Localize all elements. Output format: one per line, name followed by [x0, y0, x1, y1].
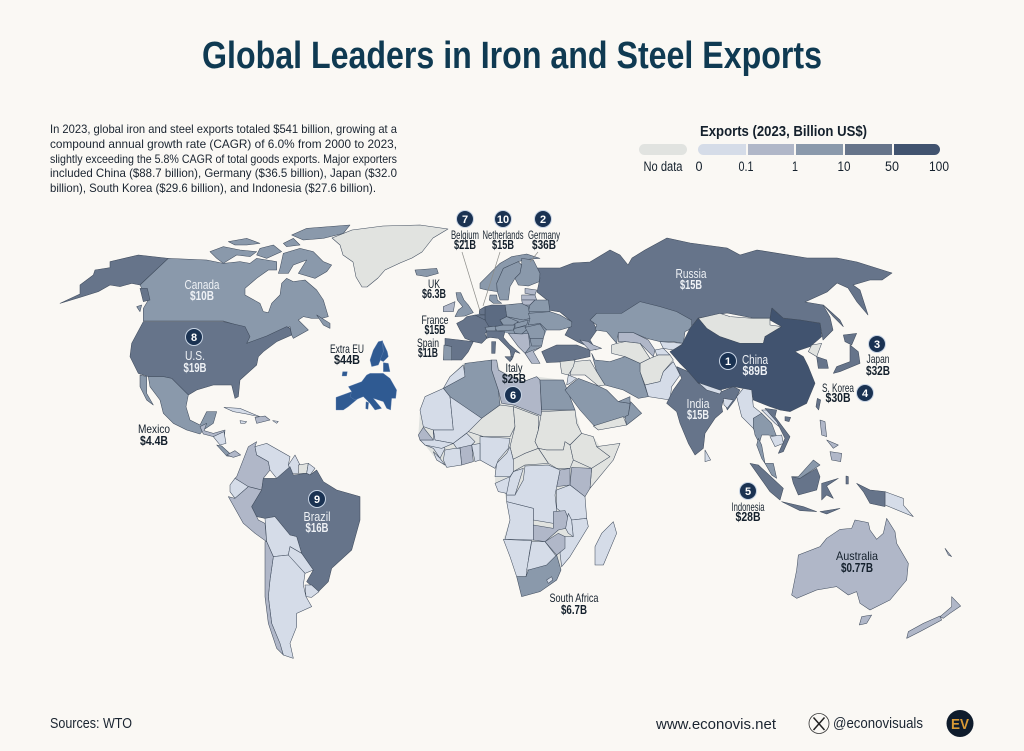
- label: Canada: [184, 278, 220, 303]
- footer: X handle: @econovisuals: [833, 715, 923, 732]
- text block: summary paragraph: included China ($88.7 billion), Germany ($36.5 billion), Japan ($32.0: [50, 166, 397, 180]
- legend: exports scale: 50: [885, 159, 899, 174]
- label: Italy: [502, 361, 526, 404]
- label: UK: UK: [428, 277, 440, 291]
- label: Mexico: Mexico: [138, 422, 170, 436]
- label: China: 1: [725, 356, 731, 368]
- map region: Southeast Asia: [737, 388, 885, 514]
- label: Japan: $32B: [866, 364, 890, 378]
- label: Extra EU: [330, 342, 364, 367]
- map region: Extra EU inset: [336, 341, 397, 410]
- label: Germany: Germany: [528, 228, 560, 242]
- text block: summary paragraph: [50, 122, 397, 195]
- label: U.S.: $19B: [184, 361, 206, 375]
- label: Belgium: 7: [462, 214, 468, 226]
- label: Italy: Italy: [506, 361, 522, 375]
- label: South Africa: $6.7B: [561, 603, 587, 617]
- legend: exports scale: 1: [792, 159, 798, 174]
- label: Japan: Japan: [866, 352, 890, 366]
- label: France: France: [422, 313, 449, 327]
- map region: East and South Asia: [667, 305, 913, 517]
- legend: exports scale: [639, 123, 949, 174]
- label: South Africa: [550, 591, 599, 617]
- label: Brazil: Brazil: [304, 510, 330, 524]
- world map: [60, 225, 961, 658]
- map region: South America: [228, 442, 360, 658]
- label: Spain: $11B: [418, 346, 438, 360]
- footer: website: www.econovis.net: [655, 716, 777, 733]
- legend: exports scale: 100: [929, 159, 949, 174]
- map region: Middle East and Central Asia: [560, 302, 692, 430]
- leader lines to callouts: [462, 252, 538, 311]
- label: Australia: $0.77B: [841, 561, 873, 575]
- logo: EV: [946, 710, 974, 737]
- label: Japan: 3: [874, 339, 880, 351]
- label: South Korea: $30B: [826, 391, 850, 405]
- map region: Canada and Alaska: [60, 225, 350, 343]
- label: Netherlands: 10: [497, 214, 509, 226]
- label: U.S.: [184, 328, 206, 375]
- label: South Korea: [822, 381, 874, 405]
- label: India: India: [686, 397, 710, 411]
- legend: exports scale: 0: [696, 159, 702, 174]
- label: UK: $6.3B: [422, 287, 446, 301]
- label: India: [686, 397, 710, 422]
- label: Netherlands: Netherlands: [482, 228, 524, 242]
- label: Extra EU: Extra EU: [330, 342, 364, 356]
- map region: Greenland: [332, 225, 448, 287]
- label: Netherlands: $15B: [492, 238, 514, 252]
- label: China: [720, 352, 768, 378]
- label: Brazil: [304, 490, 330, 535]
- label: Mexico: $4.4B: [140, 434, 168, 448]
- text block: summary paragraph: slightly exceeding the 5.8% CAGR of total goods exports. Major exporters: [50, 152, 397, 166]
- label: Indonesia: $28B: [736, 510, 760, 524]
- legend: exports scale: No data: [644, 159, 683, 174]
- label: Australia: Australia: [836, 549, 878, 563]
- legend: exports scale: 10: [838, 159, 850, 174]
- label: Germany: 2: [540, 214, 546, 226]
- label: China: $89B: [742, 364, 768, 378]
- label: Brazil: 9: [314, 494, 320, 506]
- label: Canada: $10B: [190, 289, 214, 303]
- label: U.S.: U.S.: [185, 349, 205, 363]
- label: Belgium: [451, 210, 479, 252]
- label: Mexico: [138, 422, 170, 448]
- label: Russia: $15B: [680, 278, 702, 292]
- label: South Africa: South Africa: [550, 591, 599, 605]
- map region: Iceland: [415, 268, 438, 277]
- legend: exports scale: 0.1: [738, 159, 754, 174]
- label: UK: [422, 277, 446, 301]
- label: China: China: [742, 353, 768, 367]
- label: South Korea: 4: [862, 388, 869, 400]
- logo: EV: EV: [951, 716, 969, 733]
- label: Italy: 6: [510, 390, 516, 402]
- map region: Europe: [443, 254, 590, 363]
- label: Italy: $25B: [502, 372, 526, 386]
- map region: Africa: [418, 360, 620, 597]
- label: Japan: [866, 336, 890, 378]
- label: Netherlands: [482, 210, 524, 252]
- legend: exports scale: Exports (2023, Billion US$): [700, 123, 867, 140]
- text block: summary paragraph: compound annual growth rate (CAGR) of 6.0% from 2000 to 2023,: [50, 137, 397, 151]
- label: Australia: [836, 549, 878, 575]
- label: Russia: [676, 267, 707, 292]
- label: Canada: Canada: [184, 278, 220, 292]
- footer: sources: Sources: WTO: [50, 715, 132, 732]
- label: Belgium: Belgium: [451, 228, 479, 242]
- label: Brazil: $16B: [306, 521, 328, 535]
- map region: Oceania: [792, 518, 961, 638]
- label: Germany: $36B: [532, 238, 556, 252]
- label: Belgium: $21B: [454, 238, 476, 252]
- label: France: $15B: [424, 323, 446, 337]
- label: France: [422, 313, 449, 337]
- label: Indonesia: Indonesia: [732, 500, 765, 514]
- map region: Russia: [537, 238, 892, 350]
- label: Extra EU: $44B: [334, 353, 360, 367]
- label: India: $15B: [687, 408, 709, 422]
- label: Indonesia: 5: [745, 486, 751, 498]
- text block: summary paragraph: billion), South Korea ($29.6 billion), and Indonesia ($27.6 billion).: [50, 181, 376, 195]
- label: Spain: [417, 336, 439, 360]
- label: U.S.: 8: [191, 332, 197, 344]
- text block: summary paragraph: In 2023, global iron and steel exports totaled $541 billion, growing at a: [50, 122, 397, 136]
- title: Global Leaders in Iron and Steel Exports: [202, 35, 822, 77]
- label: South Korea: S. Korea: [822, 381, 854, 395]
- label: Spain: Spain: [417, 336, 439, 350]
- label: Indonesia: [732, 482, 765, 524]
- label: Germany: [528, 210, 560, 252]
- footer: X handle: [809, 714, 923, 734]
- map region: USA, Mexico, Central America, Caribbean: [130, 322, 292, 457]
- label: Russia: Russia: [676, 267, 707, 281]
